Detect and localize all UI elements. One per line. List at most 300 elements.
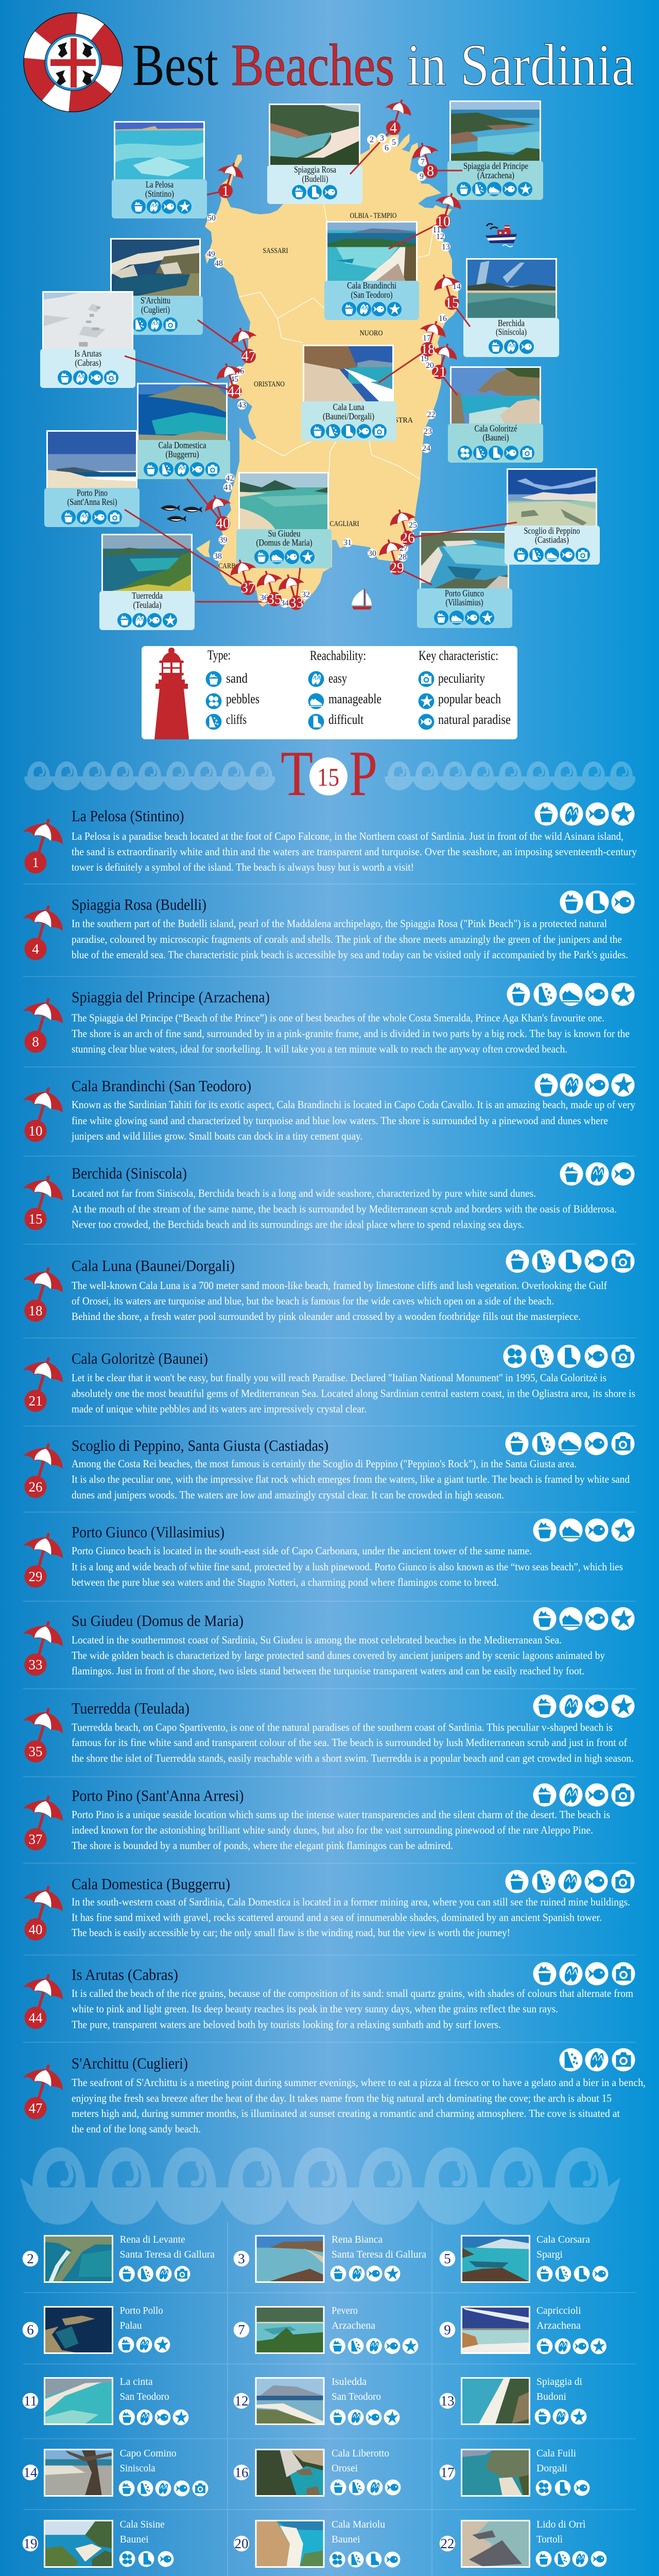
beach 13: Budoni (536, 2391, 566, 2402)
umbrella pin 4: 4 (32, 941, 39, 957)
map of Sardinia (196, 133, 458, 608)
beach 9: Capriccioli (536, 2305, 581, 2316)
umbrella pins on map (205, 100, 461, 611)
umbrella pin 44 (23, 1975, 63, 2029)
umbrella pin 33: 33 (29, 1657, 42, 1672)
characteristics icons (533, 1784, 634, 1806)
umbrella pin 8: 8 (32, 1034, 39, 1049)
legend: reachability: manageable (328, 691, 381, 706)
map card: Cala Domestica (134, 383, 230, 479)
description (72, 1458, 630, 1501)
description: Tuerredda beach, on Capo Spartivento, is one of the natural paradises of the southern coast of Sardinia. This peculiar v-shaped beach is (72, 1721, 613, 1733)
name: Cala Brandinchi (San Teodoro) (72, 1077, 251, 1095)
small numbered beach markers: 3 (380, 134, 384, 143)
umbrella pin 29: 29 (29, 1569, 42, 1584)
small numbered beach markers: 17 (423, 334, 431, 343)
umbrella pin 1 (23, 820, 63, 874)
beach 9: 9 (444, 2322, 451, 2337)
beach 9: Arzachena (536, 2320, 581, 2331)
umbrella pin 18: 18 (29, 1303, 42, 1318)
small numbered beach markers: 19 (420, 354, 428, 363)
name: Porto Giunco (Villasimius) (72, 1523, 224, 1541)
icon: tuna fish group (161, 505, 202, 522)
umbrella pin 35 (23, 1709, 63, 1762)
small numbered beach markers: 34 (281, 599, 289, 608)
top 15: Cala Brandinchi (23, 1074, 635, 1142)
umbrella pin 10 (23, 1089, 63, 1142)
characteristics icons (533, 1694, 634, 1718)
beach 9 (440, 2305, 606, 2354)
description: Porto Giunco beach is located in the south-east side of Capo Carbonara, under the ancient tower of the same name. (72, 1545, 532, 1557)
description: junipers and wild lilies grow. Small boats can dock in a tiny cement quay. (71, 1130, 362, 1142)
map card: Tuerredda (99, 534, 195, 630)
description: the end of the long sandy beach. (72, 2123, 201, 2135)
characteristics icons (534, 1074, 634, 1096)
beach 11: San Teodoro (120, 2391, 169, 2402)
small numbered beach markers: 46 (236, 367, 244, 376)
name: Spiaggia del Principe (Arzachena) (72, 988, 270, 1006)
characteristics icons (560, 1162, 634, 1185)
map card: Porto Pino: (Sant'Anna Resi) (67, 497, 117, 507)
map card: Cala Luna (301, 345, 396, 441)
beach 16: Cala Liberotto (332, 2448, 389, 2459)
umbrella pin 1: 1 (32, 855, 39, 870)
description: Among the Costa Rei beaches, the most famous is certainly the Scoglio di Peppino ("Peppino's Rock"), in the Santa Giusta area. (72, 1458, 577, 1470)
top 15: Cala Domestica (23, 1870, 634, 1940)
small numbered beach markers: 42 (226, 474, 234, 483)
beach 6 (23, 2305, 170, 2354)
description: The Spiaggia del Principe (“Beach of the Prince”) is one of best beaches of the whole Costa Smeralda, Prince Aga Khan's favourite one. (72, 1012, 604, 1024)
characteristics icons (559, 2048, 635, 2071)
description: fine white glowing sand and characterized by turquoise and blue low waters. The shore is surrounded by a pinewood and dunes where (72, 1114, 608, 1127)
small numbered beach markers: 7 (421, 158, 425, 166)
description: The wide golden beach is characterized by large protected sand dunes covered by ancient junipers and by scenic lagoons animated by (72, 1649, 605, 1662)
icon: lighthouse (154, 648, 189, 739)
legend: type (206, 648, 259, 730)
beach 2: Santa Teresa di Gallura (120, 2249, 215, 2260)
small numbered beach markers: 32 (302, 590, 310, 599)
map card: Su Giudeu: (Domus de Maria) (256, 537, 312, 548)
characteristics icons (506, 1250, 634, 1273)
icon: ship with seagulls (485, 224, 517, 247)
beach 3: Rena Bianca (332, 2234, 383, 2245)
map card: Scoglio di Peppino: Scoglio di Peppino (524, 526, 580, 536)
province names (218, 212, 413, 570)
beach 7: Arzachena (332, 2320, 375, 2331)
small numbered beach markers: 48 (215, 259, 223, 268)
beach 14 (23, 2448, 208, 2497)
map card: Spiaggia Rosa: Spiaggia Rosa (294, 164, 336, 175)
description (72, 1808, 610, 1852)
map card: Cala Goloritzè (448, 366, 543, 463)
small numbered beach markers: 41 (223, 483, 232, 492)
umbrella pins on map: 4 (390, 120, 397, 136)
map card: S'Archittu (108, 238, 203, 335)
beach 13 (440, 2376, 586, 2425)
beach 19: 19 (24, 2536, 37, 2551)
beach 6: Porto Pollo (120, 2305, 163, 2316)
small numbered beach markers: 39 (219, 536, 228, 545)
description: Located in the southernmost coast of Sardinia, Su Giudeu is among the most celebrated beaches in the Mediterranean Sea. (72, 1634, 562, 1646)
umbrella pin 29 (23, 1534, 63, 1588)
map card: Berchida (463, 258, 559, 357)
umbrella pin 37 (23, 1797, 63, 1851)
beach 11: 11 (24, 2393, 37, 2409)
heading: Top 15 (281, 738, 377, 809)
small numbered beach markers: 23 (424, 427, 432, 436)
description: meters high and, during summer months, is illuminated at sunset creating a romantic and charming atmosphere. The cove is situated at (72, 2107, 620, 2120)
top 15: Tuerredda (23, 1694, 634, 1765)
map card: Is Arutas (40, 291, 135, 388)
beach 13: Spiaggia di (536, 2376, 582, 2387)
beach 7: Pevero (332, 2305, 358, 2316)
description: white to pink and light green. Its deep beauty reaches its peak in the very sunny days, when the grains reflect the sun rays. (72, 2003, 558, 2015)
umbrella pins on map: 10 (436, 214, 450, 230)
map card: La Pelosa: (Stintino) (145, 189, 174, 199)
beach 17: Dorgali (536, 2463, 567, 2474)
legend: key characteristic: peculiarity (438, 671, 485, 686)
beach 5: Cala Corsara (536, 2234, 590, 2245)
connector lines from cards to pins (125, 128, 517, 603)
legend: key characteristic (419, 648, 511, 730)
beach 5 (440, 2234, 608, 2283)
map card: Spiaggia del Principe (447, 100, 543, 200)
description: tower is definitely a symbol of the island. The beach is always busy but is worth a visit! (72, 861, 414, 873)
legend: reachability: easy (328, 671, 347, 686)
province names: ORISTANO (254, 380, 285, 388)
map card: Su Giudeu (236, 472, 332, 568)
province names: OLBIA - TEMPIO (350, 212, 397, 220)
umbrella pins on map: 33 (289, 595, 304, 611)
map card: Su Giudeu: Su Giudeu (268, 529, 301, 539)
description (72, 2076, 646, 2135)
top 15: Porto Giunco (23, 1519, 634, 1588)
map card: Cala Goloritzè: (Baunei) (483, 432, 509, 443)
umbrella pin 40: 40 (29, 1922, 42, 1937)
beach 13: 13 (441, 2393, 454, 2409)
description (72, 1721, 634, 1765)
legend: type: cliffs (226, 712, 247, 727)
small numbered beach markers (206, 133, 461, 608)
small numbered beach markers: 28 (398, 553, 407, 562)
description: stunning clear blue waters, ideal for snorkelling. It will take you a ten minute walk to reach the anyway often crowded beach. (72, 1043, 567, 1055)
map card: Scoglio di Peppino (505, 468, 600, 565)
map card: Tuerredda: (Teulada) (133, 600, 162, 611)
description (72, 1371, 635, 1415)
name: Porto Pino (Sant'Anna Arresi) (72, 1787, 244, 1804)
legend panel (142, 646, 517, 739)
description: The pure, transparent waters are beloved both by tourists looking for a relaxing sunbath and by surf lovers. (72, 2019, 501, 2031)
beach 2 (23, 2234, 215, 2283)
characteristics icons (506, 1870, 634, 1893)
umbrella pin 47: 47 (29, 2100, 42, 2116)
map card: Cala Luna: (Baunei/Dorgali) (323, 411, 374, 422)
title: Best (132, 32, 218, 98)
map card: Cala Luna: Cala Luna (333, 402, 365, 412)
small numbered beach markers: 45 (230, 375, 238, 384)
name: La Pelosa (Stintino) (72, 807, 184, 825)
description: La Pelosa is a paradise beach located at the foot of Capo Falcone, in the Northern coast of Sardinia. Just in front of the wild Asinara island, (72, 830, 623, 842)
legend: key characteristic: natural paradise (438, 712, 511, 727)
small numbered beach markers: 24 (422, 444, 430, 453)
beach 22: Lido di Orrì (536, 2519, 586, 2530)
beach 3: 3 (238, 2251, 245, 2266)
name: Berchida (Siniscola) (72, 1164, 187, 1182)
name: Cala Luna (Baunei/Dorgali) (72, 1257, 235, 1275)
legend: reachability: Reachability: (310, 648, 366, 663)
heading: Top 15: P (349, 738, 377, 809)
description (72, 917, 628, 961)
province names: CAGLIARI (330, 520, 359, 528)
name: Cala Domestica (Buggerru) (72, 1875, 230, 1893)
small numbered beach markers: 43 (238, 401, 246, 410)
top 15: Spiaggia del Principe (23, 983, 634, 1055)
beach 7: 7 (238, 2322, 245, 2337)
map card: Cala Domestica: (Buggerru) (166, 449, 199, 460)
small numbered beach markers: 2 (370, 135, 374, 144)
top 15: S'Archittu (23, 2048, 646, 2135)
legend: type: Type: (207, 648, 231, 663)
beach 14: Capo Comino (120, 2448, 177, 2459)
beach 19: Cala Sisine (120, 2519, 165, 2530)
description: Let it be clear that it won't be easy, but finally you will reach Paradise. Declared "Italian National Monument" in 1995, Cala Goloritzè is (72, 1371, 606, 1384)
icon: sailboat (352, 589, 372, 609)
province names: SASSARI (263, 247, 288, 255)
description: Behind the shore, a fresh water pool surrounded by pink oleander and crossed by a wooden footbridge fills out the masterpiece. (72, 1310, 581, 1323)
umbrella pin 26: 26 (29, 1479, 42, 1495)
small numbered beach markers: 38 (214, 552, 222, 561)
umbrella pin 47 (23, 2066, 63, 2120)
beach 12: Isuledda (332, 2376, 367, 2387)
separators between top 15 rows (23, 884, 636, 2042)
umbrella pin 21 (23, 1359, 63, 1412)
description: of Orosei, its waters are turquoise and blue, but the beach is famous for the wide caves which open on a side of the beach. (72, 1295, 554, 1307)
beach 2: Rena di Levante (120, 2234, 185, 2245)
beach 7 (234, 2305, 418, 2354)
map card: Porto Pino (44, 430, 140, 527)
description: The shore is an arch of fine sand, surrounded by in a pink-granite frame, and is divided in two parts by a big rock. The bay is known for the (72, 1027, 630, 1040)
province names: CARBONIA (218, 562, 251, 570)
umbrella pin 44: 44 (29, 2010, 43, 2026)
map card: Porto Giunco: (Villasimius) (446, 597, 483, 608)
name: Is Arutas (Cabras) (72, 1965, 178, 1984)
legend: key characteristic: Key characteristic: (419, 648, 498, 663)
map card: Berchida: (Siniscola) (496, 327, 527, 337)
description: Never too crowded, the Berchida beach and its surroundings are the ideal place where to spend relaxing sea days. (72, 1218, 524, 1230)
umbrella pins on map: 40 (216, 516, 230, 532)
beach 6: 6 (27, 2322, 34, 2337)
beach 12 (234, 2376, 400, 2425)
top 15: Spiaggia Rosa (23, 890, 634, 961)
description (72, 1545, 623, 1588)
characteristics icons (560, 890, 634, 914)
map card: S'Archittu: S'Archittu (141, 295, 170, 306)
beach 3 (234, 2234, 426, 2283)
large wave divider (20, 2147, 620, 2225)
description (71, 1098, 635, 1142)
beach 16: 16 (235, 2465, 248, 2480)
small numbered beach markers: 5 (392, 138, 396, 147)
map card: Cala Domestica: Cala Domestica (159, 440, 206, 450)
top 15: Porto Pino (23, 1784, 634, 1852)
description: At the mouth of the stream of the same name, the beach is surrounded by Mediterranean scrub and borders with the oasis of Bidderosa. (72, 1202, 617, 1215)
small numbered beach markers: 50 (207, 214, 216, 223)
small numbered beach markers: 25 (409, 521, 417, 530)
top 15: Cala Luna (23, 1250, 634, 1323)
province names: OGLIASTRA (372, 416, 413, 425)
characteristics icons (506, 1432, 634, 1455)
logo: life ring with four moors flag (24, 13, 123, 112)
map card: Cala Brandinchi: (San Teodoro) (351, 290, 392, 300)
umbrella pins on map: 21 (432, 364, 446, 380)
small numbered beach markers: 27 (400, 544, 408, 553)
map card: Porto Giunco (417, 531, 512, 628)
description: dunes and junipers woods. The waters are low and amazingly crystal clear. It can be crowded in high season. (72, 1489, 504, 1501)
top 15: La Pelosa (23, 803, 637, 874)
beach 17: 17 (441, 2465, 454, 2480)
legend: reachability (308, 648, 381, 730)
umbrella pins on map: 29 (390, 560, 404, 576)
beach 16: Orosei (332, 2463, 358, 2474)
small numbered beach markers: 9 (420, 172, 424, 181)
small numbered beach markers: 49 (207, 250, 215, 259)
beach 20: 20 (235, 2536, 248, 2551)
title: in (407, 32, 446, 98)
name: Scoglio di Peppino, Santa Giusta (Castiadas) (72, 1436, 328, 1454)
umbrella pins on map: 8 (427, 163, 434, 179)
beach 20: Baunei (332, 2534, 360, 2545)
small numbered beach markers: 14 (453, 282, 461, 291)
map card: Is Arutas: Is Arutas (74, 348, 102, 359)
map card: Berchida: Berchida (498, 318, 525, 328)
umbrella pin 35: 35 (29, 1743, 42, 1759)
description (72, 1187, 617, 1230)
map card: Porto Giunco: Porto Giunco (445, 588, 484, 599)
characteristics icons (533, 1607, 634, 1630)
beach 22: 22 (441, 2536, 454, 2551)
map card: S'Archittu: (Cuglieri) (141, 304, 170, 315)
description (72, 830, 637, 873)
description: flamingos. Just in front of the shore, two islets stand between the turquoise transparent waters and can be easily reached by foot. (72, 1665, 584, 1677)
wave divider left (24, 761, 275, 790)
umbrella pin 37: 37 (29, 1832, 42, 1847)
description: the sand is extraordinarily white and thin and the waters are transparent and turquoise. Over the seashore, an imposing seventeenth-century (72, 845, 637, 858)
map card: Spiaggia Rosa (267, 104, 362, 204)
beach 3: Santa Teresa di Gallura (332, 2249, 426, 2260)
beach 22: Tortolì (536, 2534, 563, 2545)
umbrella pins on map: 37 (241, 580, 255, 596)
wave divider right (384, 761, 635, 790)
small numbered beach markers: 12 (436, 232, 444, 241)
umbrella pin 18 (23, 1268, 63, 1322)
beach 22 (440, 2519, 606, 2568)
beach 20: Cala Mariolu (332, 2519, 385, 2530)
top 15: Berchida (23, 1162, 634, 1230)
map card: Cala Brandinchi (324, 221, 419, 320)
umbrella pin 10: 10 (29, 1123, 42, 1139)
name: Tuerredda (Teulada) (72, 1699, 189, 1717)
description: Located not far from Siniscola, Berchida beach is a long and wide seashore, characterized by pure white sand dunes. (72, 1187, 536, 1199)
title: Beaches (231, 32, 394, 98)
small numbered beach markers: 36 (260, 594, 268, 602)
small numbered beach markers: 31 (343, 538, 352, 547)
beach 2: 2 (27, 2251, 34, 2266)
small numbered beach markers: 6 (385, 144, 389, 152)
small numbered beach markers: 22 (427, 410, 436, 419)
top 15: Cala Goloritzè (23, 1345, 635, 1415)
beach 5: 5 (444, 2251, 451, 2266)
map card: Porto Pino: Porto Pino (77, 487, 108, 498)
map card: Cala Brandinchi: Cala Brandinchi (347, 280, 396, 291)
umbrella pin 15 (23, 1177, 63, 1230)
description: Porto Pino is a unique seaside location which sums up the intense water transparencies and the silent charm of the desert. The beach is (72, 1808, 610, 1821)
beach 19 (23, 2519, 174, 2568)
map card: Is Arutas: (Cabras) (75, 358, 101, 368)
umbrella pins on map: 1 (222, 183, 229, 199)
description: The shore is bounded by a number of ponds, where the elegant pink flamingos can be admired. (72, 1839, 453, 1852)
characteristics icons (533, 1962, 635, 1986)
heading: Top 15: T (281, 738, 313, 809)
umbrella pin 33 (23, 1622, 63, 1675)
beach 6: Palau (120, 2320, 142, 2331)
description: between the pure blue sea waters and the Stagno Notteri, a charming pond where flamingos come to breed. (72, 1576, 499, 1588)
beach 20 (234, 2519, 400, 2568)
map card: Cala Goloritzè: Cala Goloritzé (475, 423, 517, 434)
small numbered beach markers: 11 (432, 226, 441, 234)
characteristics icons (507, 983, 634, 1006)
umbrella pins on map: 35 (267, 591, 282, 607)
beach 5: Spargi (536, 2249, 563, 2260)
map card: La Pelosa: La Pelosa (146, 179, 174, 190)
umbrella pin 40 (23, 1887, 63, 1940)
umbrella pin 15: 15 (29, 1211, 42, 1227)
map card: Spiaggia Rosa: (Budelli) (302, 174, 328, 184)
name: Su Giudeu (Domus de Maria) (72, 1612, 244, 1630)
map card: Tuerredda: Tuerredda (132, 590, 163, 601)
map card: Spiaggia del Principe: (Arzachena) (477, 170, 514, 181)
beach 12: San Teodoro (332, 2391, 381, 2402)
description: famous for its fine white sand and transparent colour of the sea. The beach is surrounded by lush Mediterranean scrub and just in front of (72, 1736, 627, 1749)
map card: La Pelosa (112, 121, 207, 218)
umbrella pin 26 (23, 1445, 63, 1498)
name: Spiaggia Rosa (Budelli) (72, 895, 206, 913)
umbrella pins on map: 44 (228, 384, 242, 400)
beach 19: Baunei (120, 2534, 149, 2545)
small numbered beach markers: 16 (439, 314, 447, 323)
beach 14: Siniscola (120, 2463, 155, 2474)
beach 17 (440, 2448, 589, 2497)
small numbered beach markers: 20 (426, 361, 434, 370)
description: It has fine sand mixed with gravel, rocks scattered around and a sea of innumerable shades, dominated by an ancient Spanish tower. (72, 1911, 602, 1924)
small numbered beach markers: 30 (368, 549, 376, 558)
description: made of unique white pebbles and its waters are impressively crystal clear. (72, 1402, 367, 1415)
description: enjoying the fresh sea breeze after the heat of the day. It takes name from the big natural arch dominating the cove; the arch is about 15 (72, 2092, 612, 2104)
name: Cala Goloritzè (Baunei) (72, 1349, 208, 1367)
beach 11 (23, 2376, 188, 2425)
description: In the southern part of the Budelli island, pearl of the Maddalena archipelago, the Spiaggia Rosa ("Pink Beach") is a protected natural (72, 917, 607, 929)
umbrella pins on map: 47 (241, 348, 256, 364)
heading: Top 15: 15 (317, 762, 339, 791)
province names: NUORO (359, 329, 383, 337)
top 15: Is Arutas (23, 1962, 635, 2031)
description: The well-known Cala Luna is a 700 meter sand moon-like beach, framed by limestone cliffs and lush vegetation. Overlooking the Gulf (72, 1279, 607, 1292)
umbrella pin 4 (23, 907, 63, 960)
characteristics icons (533, 1519, 634, 1541)
title (132, 32, 635, 98)
umbrella pin 8 (23, 999, 63, 1053)
legend: type: sand (226, 671, 248, 686)
beach 11: La cinta (120, 2376, 153, 2387)
